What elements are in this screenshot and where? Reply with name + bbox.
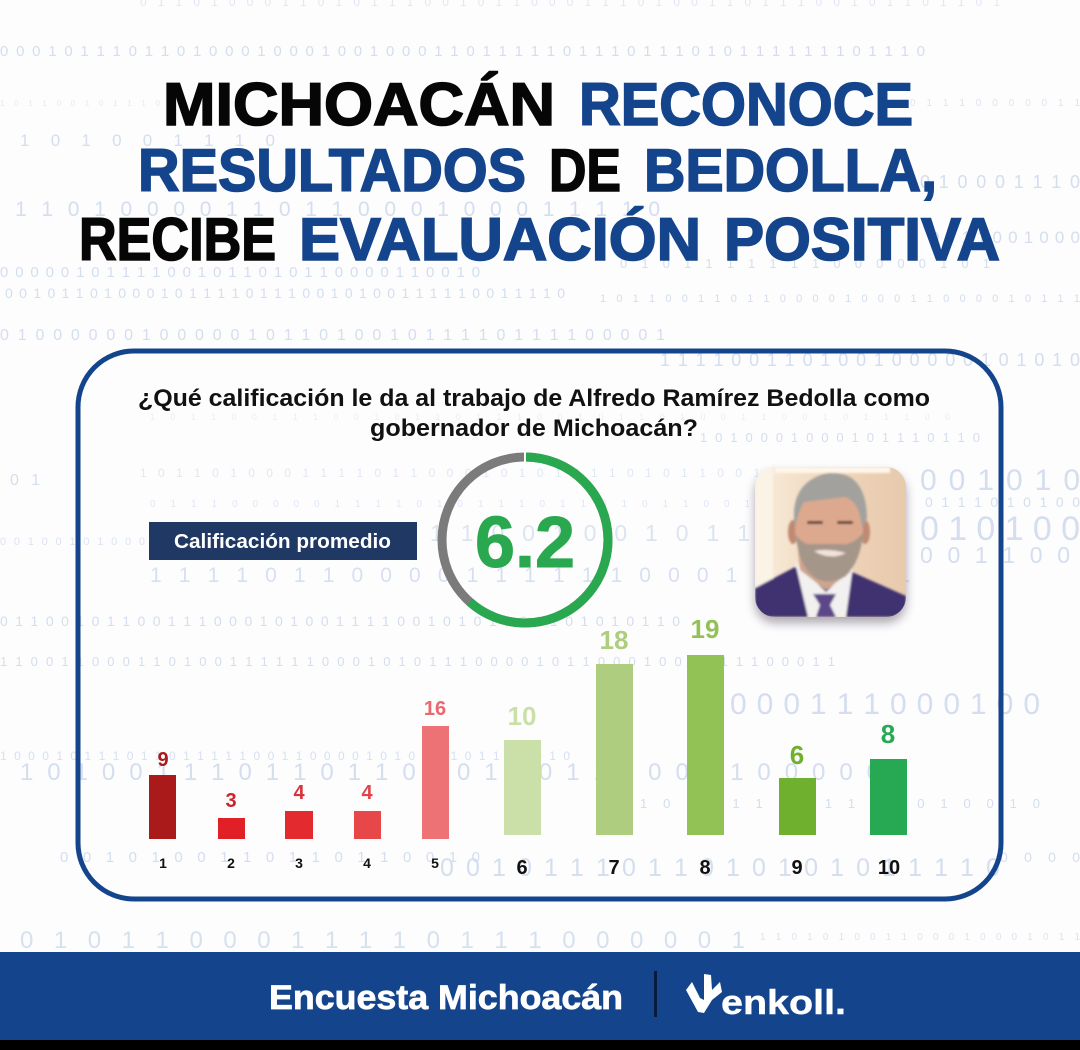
bar: 9: 9 <box>791 857 803 879</box>
label: average score: Calificación promedio <box>174 530 391 553</box>
panel: survey question and results <box>78 351 1001 899</box>
binary code background pattern: 0 0 0 0 <box>1000 849 1080 865</box>
tie <box>813 594 836 617</box>
binary code background pattern: 1 0 1 0 0 1 1 1 0 1 1 0 1 1 0 1 0 1 1 0 1 1 1 0 0 0 1 0 0 0 0 0 <box>20 759 880 786</box>
bar: 10: 8 <box>881 719 895 749</box>
bar: 7: 7 <box>608 857 620 879</box>
suit <box>755 567 906 617</box>
binary code background pattern: 1 0 1 1 0 0 1 0 1 1 1 0 <box>0 99 161 108</box>
binary code background pattern: 0 1 1 1 0 0 0 0 0 1 1 <box>910 98 1080 109</box>
bar chart: rating distribution <box>149 614 907 879</box>
binary code background pattern: 1 0 1 0 0 0 1 0 0 0 1 0 1 1 1 0 1 1 0 <box>700 430 980 445</box>
binary code background pattern: 1 1 1 1 0 0 1 1 0 1 0 0 1 0 0 0 0 0 1 0 1 0 1 0 <box>660 350 1080 370</box>
bar: 6: 6 <box>516 857 528 879</box>
bar: 2 <box>218 790 245 871</box>
binary code background pattern: 1 0 1 1 0 0 1 1 1 0 0 1 0 1 1 0 1 1 1 0 0 1 0 1 1 0 1 0 0 1 1 0 0 1 0 1 1 1 0 0 <box>150 412 950 422</box>
bar: 3: 4 <box>293 782 305 804</box>
bar: 8 <box>687 614 724 879</box>
title line 3: EVALUACIÓN <box>299 206 701 273</box>
binary code background pattern: 1 1 0 0 1 0 0 1 0 1 1 <box>430 520 750 546</box>
bar: 5: 16 <box>424 698 446 720</box>
bar: 6 <box>504 701 541 879</box>
photo: Alfredo Ramírez Bedolla portrait <box>755 467 906 623</box>
bar: 7: 18 <box>600 625 628 655</box>
binary code background pattern: 0 0 1 0 0 1 0 1 0 0 0 <box>0 536 145 548</box>
binary code background pattern: 0 0 0 1 0 1 1 1 0 1 1 0 1 0 0 0 1 0 0 0 1 0 0 1 0 0 0 1 1 0 1 1 1 1 1 0 1 1 1 0 1 1 1 0 1 0 1 1 1 1 1 1 1 0 1 1 1 0 <box>0 43 925 60</box>
face <box>794 496 864 546</box>
gauge: average score 6.2 <box>442 450 608 623</box>
bar: 9: 6 <box>790 740 804 770</box>
binary code background pattern: 1 0 1 1 0 1 0 0 0 1 1 1 1 0 1 1 0 0 0 1 0 1 0 1 0 1 1 0 1 0 1 1 0 0 1 <box>140 466 760 480</box>
bar: 2: 3 <box>225 790 237 812</box>
neck <box>798 551 840 590</box>
mouth <box>814 550 846 557</box>
label: average score <box>149 522 417 560</box>
bar: 9 <box>779 740 816 879</box>
title line 1: MICHOACÁN <box>163 71 555 138</box>
bar: 3: 3 <box>295 855 303 871</box>
hair <box>794 473 867 528</box>
question heading: ¿Qué calificación le da al trabajo de Alfredo Ramírez Bedolla como <box>138 385 930 412</box>
binary code background pattern: 0 1 0 0 0 1 1 1 0 <box>920 172 1080 192</box>
bar: 1: 1 <box>159 855 167 871</box>
footer band <box>0 952 1080 1050</box>
bar: 7 <box>596 625 633 879</box>
binary code background pattern: 1 0 1 0 1 1 0 0 1 1 0 1 0 1 0 0 1 0 <box>640 796 1040 811</box>
binary code background pattern: 1 0 0 0 1 0 1 1 1 0 1 1 0 1 1 1 1 1 0 0 1 1 0 0 0 0 1 0 1 0 1 0 1 0 1 1 0 0 0 1 0 <box>0 749 570 763</box>
title line 2 <box>138 137 937 204</box>
binary code background pattern: 0 0 1 0 1 0 0 1 1 0 1 1 0 1 1 0 0 1 0 <box>60 849 480 866</box>
bar: 5 <box>422 698 449 871</box>
binary code background pattern: 1 0 1 1 0 0 1 1 0 1 1 0 0 0 0 1 0 0 0 1 1 0 0 0 0 1 0 1 1 1 <box>600 293 1080 305</box>
bar: 5: 5 <box>431 855 439 871</box>
title line 2: BEDOLLA, <box>644 137 937 204</box>
binary code background pattern: 1 1 1 1 0 1 1 0 0 0 0 1 1 1 1 1 1 0 0 0 1 0 0 0 0 1 1 <box>150 564 910 587</box>
title <box>79 71 1000 273</box>
title line 3: RECIBE <box>79 206 276 273</box>
question heading: gobernador de Michoacán? <box>370 415 698 442</box>
logo: Enkoll <box>686 974 846 1022</box>
title line 1: RECONOCE <box>579 71 913 138</box>
binary code background pattern: 0 0 0 0 0 1 0 1 1 1 1 0 0 1 0 1 1 0 1 0 1 1 0 0 0 0 1 1 0 0 1 0 <box>0 264 480 281</box>
binary code background pattern: 0 0 1 1 0 0 1 0 0 0 <box>930 228 1080 247</box>
title line 2: DE <box>549 137 621 204</box>
footer text: Encuesta Michoacán: Encuesta Michoacán <box>269 979 623 1017</box>
bar: 1 <box>149 749 176 871</box>
binary code background pattern: 0 0 1 0 1 0 <box>920 464 1080 497</box>
binary code background pattern: 0 1 0 1 0 0 <box>920 510 1080 548</box>
binary code background pattern: 0 0 1 1 0 0 <box>920 542 1070 568</box>
binary code background pattern: 0 1 1 0 0 1 0 1 1 0 0 1 1 1 0 0 0 1 0 1 0 0 1 1 1 1 0 0 1 0 1 0 1 1 0 0 1 0 1 0 1 0 1 1 0 <box>0 613 680 629</box>
bar: 1: 9 <box>157 749 169 771</box>
binary code background pattern: 1 1 0 0 1 1 0 0 0 1 1 0 1 0 0 1 1 1 1 1 1 0 0 0 1 0 1 0 1 1 1 0 0 0 0 1 0 1 1 0 0 0 1 0 0 0 1 1 1 1 0 0 0 1 1 <box>0 654 835 669</box>
title line 2: RESULTADOS <box>138 137 526 204</box>
bar: 4: 4 <box>363 855 371 871</box>
eyes <box>807 521 823 524</box>
binary code background pattern: 1 1 0 1 0 1 0 0 1 1 0 0 0 1 0 0 0 1 0 1 1 <box>760 932 1080 943</box>
binary code background pattern: 1 0 1 0 0 1 1 1 0 <box>20 131 275 150</box>
beard <box>796 533 863 582</box>
title line 1 <box>163 71 913 138</box>
bar: 10: 10 <box>878 857 900 879</box>
question heading <box>138 385 930 442</box>
binary code background pattern: 0 1 1 1 0 1 0 1 0 0 <box>925 494 1080 510</box>
binary code background pattern: 0 1 0 1 1 0 0 0 1 1 1 1 0 1 1 1 0 0 0 0 0 1 <box>20 927 745 954</box>
bar: 4 <box>354 782 381 871</box>
bar: 10 <box>870 719 907 879</box>
title line 3 <box>79 206 1000 273</box>
binary code background pattern: 0 1 0 1 1 1 1 1 1 1 0 0 0 0 0 1 0 1 <box>620 256 990 271</box>
binary code background pattern: 0 1 0 0 0 0 0 0 1 0 0 0 0 0 1 0 1 1 0 1 0 0 1 0 1 1 1 1 0 1 1 1 1 0 0 0 0 1 <box>0 327 665 344</box>
binary code background pattern: 0 1 1 1 0 0 0 0 0 1 1 1 1 0 1 0 1 1 1 0 1 1 0 1 0 1 1 0 0 1 <box>150 499 750 510</box>
ears <box>788 520 798 544</box>
bar: 3 <box>285 782 313 871</box>
binary code background pattern: 1 1 0 1 0 0 0 0 1 1 0 1 1 0 0 0 1 0 0 0 1 1 1 1 0 <box>15 198 660 221</box>
binary code background pattern: 0 0 1 0 1 1 0 1 0 0 0 1 0 1 1 1 1 0 1 1 1 0 0 1 0 1 0 0 1 1 1 1 1 0 0 1 1 1 1 0 <box>5 285 565 301</box>
bar: 8: 19 <box>691 614 719 644</box>
logo: Enkoll: enkoll. <box>721 984 846 1022</box>
binary code background pattern: 0 0 1 0 1 1 1 0 1 1 0 1 0 1 0 1 0 1 1 1 1 0 <box>440 854 1000 882</box>
bar: 8: 8 <box>699 857 711 879</box>
title line 3: POSITIVA <box>724 206 1000 273</box>
shirt <box>795 562 853 617</box>
binary code background pattern: 0 1 <box>10 472 40 489</box>
bar: 6: 10 <box>508 701 536 731</box>
bar: 4: 4 <box>361 782 373 804</box>
gauge: average score 6.2: 6.2 <box>475 503 575 583</box>
bar: 2: 2 <box>227 855 235 871</box>
binary code background pattern: 0 0 0 1 1 1 0 0 0 1 0 0 <box>730 688 1040 721</box>
